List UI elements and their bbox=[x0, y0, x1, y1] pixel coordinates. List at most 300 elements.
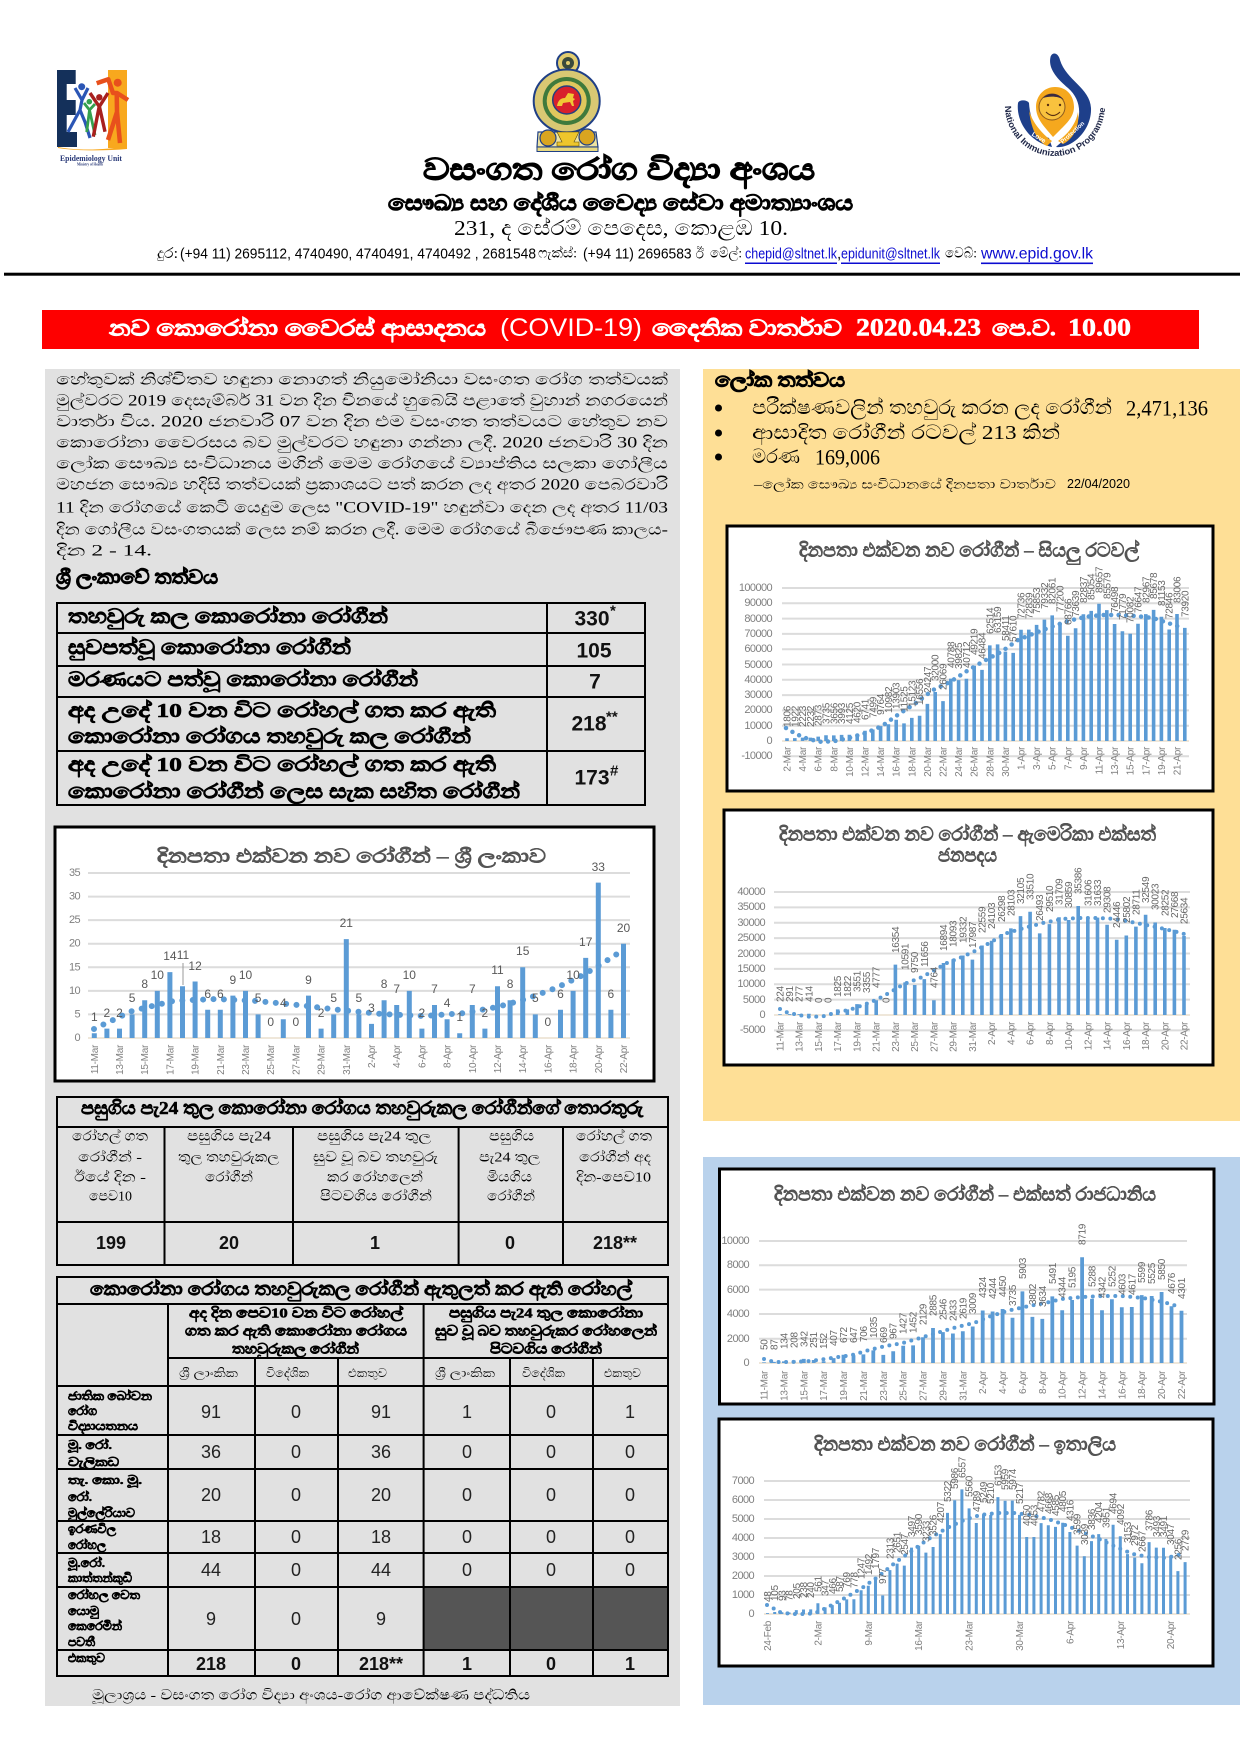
chart: Sri Lanka daily new cases: 15 bbox=[69, 961, 80, 973]
table: hospitals admitting patients: ඉරණවිල bbox=[68, 1522, 117, 1538]
chart: Italy daily new cases: 2667 bbox=[1137, 1530, 1148, 1552]
chart: Sri Lanka daily new cases: 2 bbox=[318, 1006, 325, 1020]
table: hospitals admitting patients: රෝහල වෙත bbox=[68, 1588, 140, 1604]
chart: United States daily new cases: ජනපදය bbox=[938, 846, 997, 868]
chart: United States daily new cases: 4-Apr bbox=[1006, 1021, 1017, 1045]
summary table: ** bbox=[606, 708, 618, 726]
summary table: 173 bbox=[574, 766, 610, 790]
table: hospitals admitting patients: 0 bbox=[625, 1560, 635, 1580]
chart: all countries daily new cases: -10000 bbox=[741, 750, 772, 762]
chart: United Kingdom daily new cases: 15-Mar bbox=[799, 1370, 810, 1401]
chart: Sri Lanka daily new cases: 21 bbox=[340, 916, 353, 930]
chart: Sri Lanka daily new cases: 8-Apr bbox=[443, 1044, 454, 1068]
chart: United States daily new cases: 28252 bbox=[1160, 889, 1171, 916]
chart: United States daily new cases: 16-Apr bbox=[1122, 1021, 1133, 1050]
chart: United States daily new cases: 30023 bbox=[1151, 883, 1162, 910]
chart: United Kingdom daily new cases: 3634 bbox=[1038, 1285, 1049, 1307]
table: last 24 hours information: 1 bbox=[370, 1233, 380, 1253]
contact line: epidunit@sltnet.lk bbox=[841, 246, 940, 262]
chart: United Kingdom daily new cases: 5599 bbox=[1137, 1261, 1148, 1283]
chart: United States daily new cases: 26493 bbox=[1035, 894, 1046, 921]
chart: United States daily new cases: 25802 bbox=[1122, 896, 1133, 923]
chart: Sri Lanka daily new cases: 17-Mar bbox=[166, 1044, 176, 1075]
chart: United Kingdom daily new cases: 5288 bbox=[1088, 1265, 1098, 1287]
chart: United States daily new cases: 13-Mar bbox=[795, 1021, 806, 1052]
table: hospitals admitting patients: 1 bbox=[625, 1402, 635, 1422]
chart: United States daily new cases: 2-Apr bbox=[987, 1021, 998, 1045]
contact line: (+94 11) 2695112, 4740490, 4740491, 4740492 , 2681548 bbox=[180, 246, 536, 262]
chart: United Kingdom daily new cases: 12-Apr bbox=[1078, 1370, 1089, 1399]
chart: United States daily new cases: 19332 bbox=[958, 916, 969, 943]
chart: all countries daily new cases: 14-Mar bbox=[876, 746, 887, 777]
chart: United Kingdom daily new cases: 22-Apr bbox=[1177, 1370, 1188, 1399]
chart: Sri Lanka daily new cases: 27-Mar bbox=[292, 1044, 302, 1075]
chart: United States daily new cases: 35000 bbox=[737, 901, 765, 913]
chart: United Kingdom daily new cases: 16-Apr bbox=[1117, 1370, 1128, 1399]
intro paragraph: වාර්තා විය. 2020 ජනවාරි 07 වන දින එම වසංගත තත්වයට හේතුව නව bbox=[56, 412, 668, 430]
chart: Italy daily new cases: 466 bbox=[828, 1577, 839, 1594]
chart: United Kingdom daily new cases bbox=[720, 1169, 1214, 1404]
chart: Italy daily new cases: 3047 bbox=[1166, 1523, 1177, 1545]
chart: United States daily new cases: 0 bbox=[881, 997, 892, 1003]
chart: all countries daily new cases: 90000 bbox=[744, 597, 772, 609]
chart: United States daily new cases: 21-Mar bbox=[872, 1021, 883, 1052]
chart: United Kingdom daily new cases: 647 bbox=[849, 1326, 860, 1343]
chart: Sri Lanka daily new cases: 11 bbox=[491, 963, 504, 977]
chart: Italy daily new cases: 205 bbox=[792, 1582, 803, 1599]
chart: Italy daily new cases: 240 bbox=[806, 1581, 817, 1598]
chart: United Kingdom daily new cases: 4344 bbox=[1058, 1276, 1069, 1298]
chart: United States daily new cases: 14-Apr bbox=[1103, 1021, 1114, 1050]
chart: all countries daily new cases: 32000 bbox=[931, 654, 942, 681]
header bbox=[57, 51, 1105, 264]
chart: Sri Lanka daily new cases: 4 bbox=[280, 996, 287, 1010]
banner: නව කොරෝනා වෛරස් ආසාදනය bbox=[108, 315, 486, 342]
intro paragraph: දින 2 - 14. bbox=[56, 542, 152, 560]
chart: Italy daily new cases: 3786 bbox=[1145, 1509, 1156, 1531]
chart: Italy daily new cases: 2313 bbox=[885, 1537, 896, 1559]
title: වසංගත රෝග විද්‍යා අංශය bbox=[423, 154, 815, 190]
contact line: මේල්: bbox=[710, 245, 742, 262]
chart: Sri Lanka daily new cases: 21-Mar bbox=[216, 1044, 227, 1075]
chart: United Kingdom daily new cases: 50 bbox=[760, 1339, 770, 1350]
chart: United Kingdom daily new cases: 3735 bbox=[1008, 1284, 1019, 1306]
chart: United Kingdom daily new cases: 134 bbox=[779, 1332, 790, 1349]
chart: Sri Lanka daily new cases: 33 bbox=[592, 860, 605, 874]
chart: United Kingdom daily new cases: දිනපතා එක්වන නව රෝගීන් – එක්සත් රාජධානිය bbox=[774, 1183, 1156, 1206]
table: last 24 hours information: තුල තහවුරුකල bbox=[178, 1150, 279, 1166]
chart: United Kingdom daily new cases: 4-Apr bbox=[998, 1370, 1009, 1394]
chart: United States daily new cases bbox=[724, 810, 1213, 1065]
chart: Italy daily new cases: 2-Mar bbox=[813, 1620, 824, 1646]
chart: United States daily new cases: 40000 bbox=[737, 886, 765, 898]
chart: Italy daily new cases: 48 bbox=[763, 1591, 774, 1602]
chart: Sri Lanka daily new cases: 30 bbox=[69, 891, 80, 903]
table: last 24 hours information: රෝගීන් bbox=[205, 1169, 253, 1186]
table: hospitals admitting patients: අද දින පෙව10 වන විට රෝහල් bbox=[189, 1304, 404, 1322]
chart: all countries daily new cases: 2232 bbox=[806, 705, 817, 727]
chart: Sri Lanka daily new cases: 1 bbox=[456, 1010, 463, 1024]
table: last 24 hours information: රෝහල් ගත bbox=[72, 1128, 149, 1144]
chart: all countries daily new cases: 62514 bbox=[985, 607, 996, 634]
chart: United Kingdom daily new cases: 23-Mar bbox=[879, 1370, 890, 1401]
chart: Italy daily new cases: 2547 bbox=[900, 1533, 911, 1555]
chart: United States daily new cases: 4764 bbox=[929, 966, 940, 988]
table: hospitals admitting patients: ශ්‍රී ලාංකික bbox=[434, 1366, 495, 1381]
chart: United Kingdom daily new cases: 21-Mar bbox=[859, 1370, 870, 1401]
table: hospitals admitting patients: 0 bbox=[546, 1560, 556, 1580]
summary table: කොරෝනා රෝගීන් ලෙස සැක සහිත රෝගීන් bbox=[68, 779, 520, 805]
chart: Italy daily new cases: 3836 bbox=[1087, 1508, 1098, 1530]
chart: all countries daily new cases: 30000 bbox=[744, 689, 772, 701]
chart: United Kingdom daily new cases: 19-Mar bbox=[839, 1370, 850, 1401]
chart: all countries daily new cases: 2-Mar bbox=[782, 746, 794, 772]
chart: United Kingdom daily new cases: 4603 bbox=[1117, 1273, 1128, 1295]
chart: Sri Lanka daily new cases: 0 bbox=[293, 1015, 300, 1029]
chart: Italy daily new cases: 4694 bbox=[1109, 1492, 1120, 1514]
chart: all countries daily new cases: 73639 bbox=[1071, 590, 1082, 617]
chart: United Kingdom daily new cases: 4244 bbox=[988, 1277, 999, 1299]
chart: United Kingdom daily new cases: 5491 bbox=[1048, 1262, 1059, 1284]
chart: United States daily new cases: 30859 bbox=[1064, 881, 1075, 908]
contact line: ෆැක්ස්: bbox=[538, 245, 577, 262]
table: last 24 hours information: රෝගීන් - bbox=[78, 1149, 142, 1166]
chart: Italy daily new cases: 4092 bbox=[1116, 1503, 1127, 1525]
table: last 24 hours information: රෝහල් ගත bbox=[576, 1128, 653, 1144]
chart: all countries daily new cases: 82967 bbox=[1141, 576, 1152, 603]
chart: Sri Lanka daily new cases: 10 bbox=[151, 968, 164, 982]
chart: United States daily new cases: 18-Apr bbox=[1141, 1021, 1152, 1050]
chart: all countries daily new cases: 17-Apr bbox=[1141, 746, 1152, 775]
banner bbox=[42, 310, 1199, 349]
summary table: අද උදේ 10 වන විට රෝහල් ගත කර ඇති bbox=[68, 698, 497, 724]
chart: United States daily new cases: 20000 bbox=[737, 948, 765, 960]
table: hospitals admitting patients: 91 bbox=[371, 1402, 391, 1422]
chart: all countries daily new cases: 9764 bbox=[876, 693, 887, 715]
chart: all countries daily new cases: 28-Mar bbox=[985, 746, 996, 777]
chart: Sri Lanka daily new cases: 5 bbox=[532, 991, 539, 1005]
table: hospitals admitting patients: කෙරෙමින් bbox=[68, 1619, 122, 1633]
chart: United States daily new cases: 3355 bbox=[862, 971, 873, 993]
chart: Sri Lanka daily new cases: 18-Apr bbox=[569, 1044, 580, 1073]
chart: Italy daily new cases: 5249 bbox=[979, 1481, 990, 1503]
panel: United Kingdom and Italy bbox=[703, 1157, 1240, 1705]
table: last 24 hours information: කර රෝහලෙන් bbox=[327, 1169, 423, 1186]
chart: Italy daily new cases: 78 bbox=[785, 1590, 796, 1601]
intro paragraph: ලෝක සෞඛ්‍ය සංවිධානය මගින් මෙම රෝගයේ ව්‍යාප්තිය සලකා ගෝලීය bbox=[56, 454, 668, 474]
chart: United Kingdom daily new cases: 669 bbox=[879, 1326, 890, 1343]
chart: United States daily new cases: 24103 bbox=[987, 902, 998, 929]
chart: United States daily new cases: 0 bbox=[814, 997, 825, 1003]
table: last 24 hours information: දින-පෙව10 bbox=[576, 1170, 651, 1186]
chart: all countries daily new cases: 16556 bbox=[915, 678, 926, 705]
chart: Italy daily new cases: 977 bbox=[878, 1567, 889, 1584]
table: hospitals admitting patients: 0 bbox=[462, 1560, 472, 1580]
chart: United Kingdom daily new cases: 17-Mar bbox=[819, 1370, 830, 1401]
chart: Sri Lanka daily new cases: 7 bbox=[431, 982, 438, 996]
chart: all countries daily new cases: 1806 bbox=[782, 705, 794, 727]
table: hospitals admitting patients: එකතුව bbox=[604, 1366, 641, 1380]
chart: United Kingdom daily new cases: 18-Apr bbox=[1137, 1370, 1148, 1399]
world status bullets: ආසාදිත රෝගීන් රටවල් 213 කින් bbox=[752, 421, 1060, 445]
table: hospitals admitting patients: 1 bbox=[462, 1654, 472, 1674]
chart: United States daily new cases: 10000 bbox=[737, 978, 765, 990]
table: last 24 hours information: රෝගීන් bbox=[487, 1188, 535, 1204]
chart: Italy daily new cases: 4204 bbox=[1094, 1501, 1105, 1523]
chart: United States daily new cases: 20-Apr bbox=[1160, 1021, 1171, 1050]
table: hospitals admitting patients: යොමු bbox=[68, 1604, 99, 1620]
table: last 24 hours information bbox=[57, 1097, 668, 1265]
chart: United States daily new cases: 414 bbox=[804, 985, 815, 1002]
chart: all countries daily new cases: 10-Mar bbox=[845, 746, 856, 777]
chart: all countries daily new cases: 76647 bbox=[1134, 586, 1144, 613]
chart: Sri Lanka daily new cases: 31-Mar bbox=[342, 1044, 353, 1075]
chart: Sri Lanka daily new cases: 20-Apr bbox=[594, 1044, 605, 1073]
chart: Sri Lanka daily new cases: 8 bbox=[507, 977, 514, 991]
chart: United States daily new cases: 224 bbox=[776, 985, 786, 1002]
chart: United States daily new cases: 8-Apr bbox=[1045, 1021, 1056, 1045]
table: hospitals admitting patients: මුල්ලේරියාව bbox=[68, 1505, 135, 1522]
table: hospitals admitting patients: රෝග bbox=[68, 1404, 97, 1418]
contact line: www.epid.gov.lk bbox=[980, 246, 1094, 262]
chart: all countries daily new cases: 26069 bbox=[938, 663, 950, 690]
chart: all countries daily new cases: 68766 bbox=[1063, 598, 1074, 625]
icon: National Immunization Programme logo: Love bbox=[1030, 131, 1047, 145]
contact line: , bbox=[837, 246, 841, 262]
table: hospitals admitting patients: 18 bbox=[201, 1527, 221, 1547]
table: last 24 hours information: සුව වූ බව තහවුරු bbox=[313, 1150, 438, 1166]
intro paragraph: මුල්වරට 2019 දෙසැම්බර් 31 වන දින චීනයේ හුබෙයි පළාතේ වුහාන් නගරයෙන් bbox=[56, 391, 669, 410]
chart: all countries daily new cases: 11-Apr bbox=[1094, 746, 1106, 774]
chart: Italy daily new cases: 3039 bbox=[1080, 1523, 1091, 1545]
table: hospitals admitting patients: 0 bbox=[462, 1485, 472, 1505]
chart: all countries daily new cases: 4125 bbox=[845, 702, 856, 724]
chart: all countries daily new cases: 6741 bbox=[860, 698, 872, 720]
contact line: (+94 11) 2696583 ඊ bbox=[583, 246, 705, 262]
chart: United Kingdom daily new cases: 4301 bbox=[1177, 1277, 1188, 1299]
chart: all countries daily new cases: 19-Apr bbox=[1157, 746, 1168, 775]
chart: all countries daily new cases: 70000 bbox=[744, 628, 772, 640]
contact line: දුර: bbox=[157, 246, 178, 262]
chart: United States daily new cases: 15-Mar bbox=[814, 1021, 825, 1052]
chart: Sri Lanka daily new cases: 35 bbox=[69, 867, 80, 879]
summary table: 105 bbox=[576, 640, 612, 662]
chart: United States daily new cases: 24446 bbox=[1112, 901, 1123, 928]
contact line bbox=[157, 245, 1094, 262]
chart: Sri Lanka daily new cases: 5 bbox=[74, 1008, 80, 1020]
chart: United Kingdom daily new cases: 5850 bbox=[1157, 1258, 1168, 1280]
table: last 24 hours information: පැ24 තුල bbox=[479, 1150, 540, 1166]
chart: Sri Lanka daily new cases: 13-Mar bbox=[115, 1044, 126, 1075]
chart: Italy daily new cases: 20-Apr bbox=[1166, 1620, 1177, 1649]
summary table bbox=[57, 602, 645, 805]
chart: all countries daily new cases: 10000 bbox=[744, 720, 772, 732]
chart: United Kingdom daily new cases: 6-Apr bbox=[1018, 1370, 1029, 1394]
contact line: වෙබ්: bbox=[945, 246, 977, 262]
chart: Sri Lanka daily new cases: 0 bbox=[267, 1015, 274, 1029]
icon: National Immunization Programme logo bbox=[1004, 54, 1105, 156]
table: hospitals admitting patients: විද්‍යායතනය bbox=[68, 1419, 138, 1434]
table: last 24 hours information: පිටවගිය රෝගීන් bbox=[320, 1188, 432, 1204]
chart: Sri Lanka daily new cases: 19-Mar bbox=[191, 1044, 202, 1075]
chart: Italy daily new cases: 4000 bbox=[732, 1532, 754, 1544]
chart: Italy daily new cases: 2972 bbox=[1130, 1524, 1141, 1546]
chart: Sri Lanka daily new cases: 1 bbox=[91, 1010, 98, 1024]
chart: all countries daily new cases: 21-Apr bbox=[1172, 746, 1184, 775]
chart: all countries daily new cases: 80000 bbox=[744, 613, 772, 625]
chart: all countries daily new cases: 63159 bbox=[993, 606, 1004, 633]
chart: all countries daily new cases: 13-Apr bbox=[1110, 746, 1121, 775]
chart: Italy daily new cases: 30-Mar bbox=[1015, 1620, 1026, 1651]
chart: all countries daily new cases: 15123 bbox=[907, 680, 918, 707]
chart: Italy daily new cases: 5322 bbox=[943, 1480, 954, 1502]
chart: all countries daily new cases: 8-Mar bbox=[829, 746, 840, 772]
chart: all countries daily new cases: 49219 bbox=[970, 628, 981, 655]
chart: Sri Lanka daily new cases: 15 bbox=[516, 944, 530, 958]
chart: all countries daily new cases: 0 bbox=[766, 735, 772, 747]
chart: Sri Lanka daily new cases: 10 bbox=[239, 968, 252, 982]
chart: Italy daily new cases: 3951 bbox=[1101, 1506, 1112, 1528]
table: hospitals admitting patients: 9 bbox=[206, 1609, 216, 1629]
chart: Sri Lanka daily new cases: 6 bbox=[608, 987, 615, 1001]
chart: all countries daily new cases: 40712 bbox=[962, 641, 973, 668]
banner: (COVID-19) bbox=[500, 314, 642, 342]
chart: all countries daily new cases: 70082 bbox=[1126, 596, 1137, 623]
chart: Sri Lanka daily new cases: 5 bbox=[255, 991, 262, 1005]
chart: Italy daily new cases: 5986 bbox=[950, 1467, 961, 1489]
chart: Italy daily new cases: 769 bbox=[842, 1571, 853, 1588]
chart: Sri Lanka daily new cases: 11 bbox=[177, 948, 190, 962]
chart: Sri Lanka daily new cases: 7 bbox=[469, 982, 476, 996]
chart: Sri Lanka daily new cases: 2 bbox=[104, 1006, 111, 1020]
chart: Italy daily new cases: 6153 bbox=[993, 1464, 1004, 1486]
table: hospitals admitting patients: පිටවගිය රෝගීන් bbox=[490, 1340, 603, 1358]
chart: United Kingdom daily new cases: 8719 bbox=[1078, 1223, 1089, 1245]
table: hospitals admitting patients: රෝ. bbox=[68, 1490, 92, 1504]
chart: Sri Lanka daily new cases: 6 bbox=[557, 987, 564, 1001]
banner: දෛනික වාර්තාව bbox=[652, 316, 842, 342]
chart: United Kingdom daily new cases: 20-Apr bbox=[1157, 1370, 1168, 1399]
icon: Epidemiology Unit logo: Epidemiology Unit bbox=[60, 153, 122, 163]
intro paragraph: දින ගෝලීය වසංගතයක් ලෙස නම් කරන ලදී. මෙම රෝගයේ බීජෞපණ කාලය- bbox=[56, 520, 668, 540]
chart: United States daily new cases: 25634 bbox=[1180, 897, 1190, 924]
table: hospitals admitting patients: 0 bbox=[291, 1442, 301, 1462]
chart: all countries daily new cases: 71779 bbox=[1118, 593, 1129, 620]
chart: Italy daily new cases: 13-Apr bbox=[1116, 1620, 1127, 1649]
chart: all countries daily new cases: 24247 bbox=[923, 666, 934, 693]
chart: all countries daily new cases: 22-Mar bbox=[938, 746, 950, 777]
chart: all countries daily new cases: 73920 bbox=[1180, 590, 1191, 617]
chart: United States daily new cases: 32105 bbox=[1016, 877, 1027, 904]
intro paragraph bbox=[56, 370, 669, 560]
chart: United States daily new cases: 28103 bbox=[1006, 889, 1017, 916]
chart: Sri Lanka daily new cases: 20 bbox=[617, 921, 630, 935]
chart: Sri Lanka daily new cases: 8 bbox=[141, 977, 148, 991]
chart: Italy daily new cases: 6000 bbox=[732, 1494, 754, 1506]
table: last 24 hours information: මියගිය bbox=[487, 1170, 532, 1186]
chart: all countries daily new cases: 89657 bbox=[1094, 566, 1106, 593]
chart: United Kingdom daily new cases: 2129 bbox=[918, 1303, 930, 1325]
summary table: # bbox=[610, 762, 619, 780]
chart: Italy daily new cases bbox=[719, 1419, 1213, 1666]
chart: Italy daily new cases: 93 bbox=[777, 1590, 788, 1601]
chart: United States daily new cases: 28711 bbox=[1131, 889, 1142, 915]
chart: all countries daily new cases: 11525 bbox=[900, 686, 910, 712]
chart: Sri Lanka daily new cases: 23-Mar bbox=[241, 1044, 252, 1075]
chart: Sri Lanka daily new cases: 16-Apr bbox=[544, 1044, 554, 1073]
chart: all countries daily new cases bbox=[727, 526, 1213, 791]
world status bullets: පරීක්ෂණවලින් තහවුරු කරන ලද රෝගීන් bbox=[752, 396, 1112, 421]
chart: all countries daily new cases: 40788 bbox=[946, 641, 957, 668]
chart: Italy daily new cases: 5000 bbox=[732, 1513, 754, 1525]
chart: Sri Lanka daily new cases: දිනපතා එක්වන නව රෝගීන් – ශ්‍රී ලංකාව bbox=[156, 845, 546, 868]
table: hospitals admitting patients: 0 bbox=[291, 1402, 301, 1422]
chart: Sri Lanka daily new cases: 29-Mar bbox=[317, 1044, 328, 1075]
chart: Italy daily new cases: 238 bbox=[799, 1581, 810, 1598]
icon: National Immunization Programme logo: Protection bbox=[1060, 121, 1086, 145]
chart: all countries daily new cases: 72846 bbox=[1165, 592, 1176, 619]
chart: United Kingdom daily new cases: 6000 bbox=[727, 1284, 749, 1296]
summary table: 218 bbox=[571, 712, 607, 736]
chart: all countries daily new cases: 15-Apr bbox=[1126, 746, 1137, 775]
chart: United States daily new cases: 30000 bbox=[737, 917, 765, 929]
table: hospitals admitting patients: තැ. කො. මූ. bbox=[68, 1473, 142, 1489]
table: hospitals admitting patients: 44 bbox=[201, 1560, 221, 1580]
chart: United Kingdom daily new cases: 4000 bbox=[727, 1308, 749, 1320]
contact line: chepid@sltnet.lk bbox=[745, 246, 837, 262]
chart: Italy daily new cases: 6557 bbox=[957, 1456, 968, 1478]
table: hospitals admitting patients: 0 bbox=[291, 1609, 301, 1629]
table: last 24 hours information: 0 bbox=[505, 1233, 515, 1253]
table: last 24 hours information: 20 bbox=[219, 1233, 239, 1253]
chart: all countries daily new cases: 1-Apr bbox=[1016, 746, 1028, 770]
chart: Italy daily new cases: 3493 bbox=[1152, 1515, 1163, 1537]
chart: all countries daily new cases: 16-Mar bbox=[892, 746, 903, 777]
chart: United Kingdom daily new cases: 10000 bbox=[721, 1235, 749, 1247]
chart: Italy daily new cases: 3000 bbox=[732, 1551, 754, 1563]
chart: Italy daily new cases: 4585 bbox=[1051, 1494, 1062, 1516]
chart: Sri Lanka daily new cases: 25-Mar bbox=[266, 1044, 277, 1075]
summary table: * bbox=[610, 602, 616, 620]
chart: United States daily new cases: 12-Apr bbox=[1083, 1021, 1094, 1050]
table: hospitals admitting patients: 0 bbox=[546, 1654, 556, 1674]
table: hospitals admitting patients: කොරෝනා රෝගය තහවුරුකල රෝගීන් ඇතුලත් කර ඇති රෝහල් bbox=[90, 1278, 633, 1301]
table: hospitals admitting patients: 0 bbox=[546, 1442, 556, 1462]
table: hospitals admitting patients: 0 bbox=[291, 1527, 301, 1547]
chart: Italy daily new cases: 9-Mar bbox=[864, 1620, 875, 1646]
table: hospitals admitting patients: 9 bbox=[376, 1609, 386, 1629]
chart: Italy daily new cases: 5959 bbox=[1001, 1468, 1012, 1490]
chart: all countries daily new cases: 4620 bbox=[853, 701, 864, 723]
chart: United States daily new cases: -5000 bbox=[740, 1024, 765, 1036]
chart: United States daily new cases: 4777 bbox=[872, 966, 883, 988]
chart: United States daily new cases: 1822 bbox=[843, 975, 854, 997]
table: hospitals admitting patients: 0 bbox=[625, 1442, 635, 1462]
chart: Italy daily new cases: 16-Mar bbox=[914, 1620, 925, 1651]
table: hospitals admitting patients: 0 bbox=[291, 1485, 301, 1505]
chart: all countries daily new cases: 50000 bbox=[744, 659, 772, 671]
table: hospitals admitting patients: 0 bbox=[546, 1485, 556, 1505]
table: last 24 hours information: 199 bbox=[96, 1233, 126, 1253]
chart: Italy daily new cases: 4782 bbox=[1037, 1490, 1048, 1512]
table: hospitals admitting patients: 218 bbox=[196, 1654, 226, 1674]
table: hospitals admitting patients: රෝහල bbox=[68, 1538, 107, 1554]
summary table: 330 bbox=[574, 608, 610, 630]
chart: United States daily new cases: 31-Mar bbox=[968, 1021, 979, 1052]
table: hospitals admitting patients: පසුගිය පැ24 තුල කොරෝනා bbox=[449, 1304, 643, 1323]
chart: United States daily new cases: 27-Mar bbox=[929, 1021, 940, 1052]
chart: United States daily new cases: 0 bbox=[824, 997, 835, 1003]
